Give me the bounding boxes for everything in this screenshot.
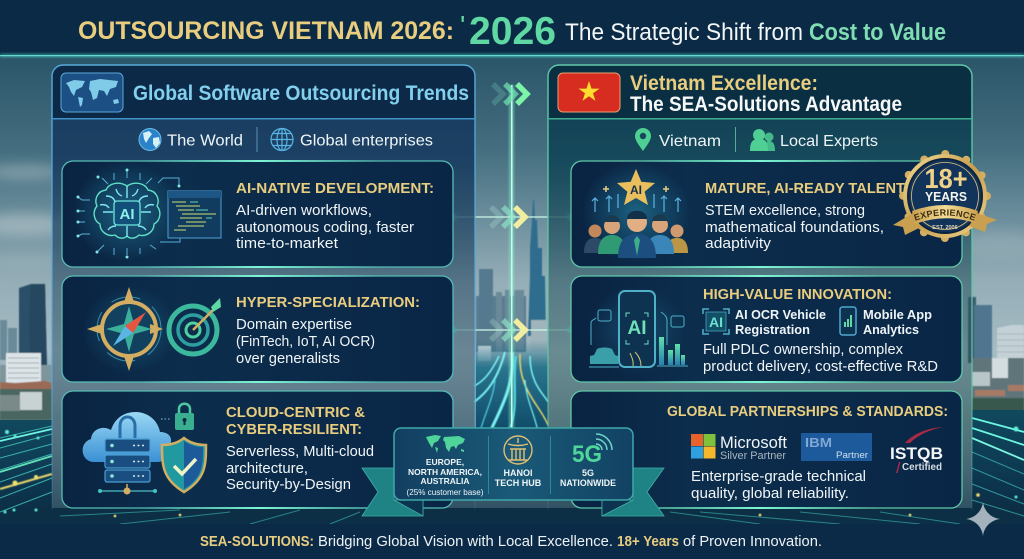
tagline text: Bridging Global Vision with Local Excellence. [318, 534, 613, 550]
text: 5G nationwide: 5G [582, 468, 594, 478]
text: hyper-specialization: (FinTech, IoT, AI OCR) [236, 333, 375, 350]
icon: AI talent team with star [581, 162, 691, 262]
badge: 18+ years experience: EST. 2006 [932, 225, 958, 231]
icon: AI brain and code window: AI [120, 206, 134, 223]
icon: globe [139, 128, 161, 150]
panel: global software outsourcing trends [52, 65, 475, 510]
text: high-value innovation description: Full PDLC ownership, complex [703, 341, 903, 358]
top title band [0, 0, 1024, 58]
text: cloud-centric and cyber-resilient [226, 405, 374, 493]
text: AI-native development: AI-NATIVE DEVELOPMENT: [236, 181, 434, 197]
card: hyper-specialization [62, 275, 453, 383]
text: Hanoi tech hub: TECH HUB [495, 478, 542, 488]
logo: Microsoft Silver Partner [691, 433, 787, 462]
icon: AI phone with car and chart: AI [628, 318, 646, 339]
icon: wire globe [271, 128, 293, 150]
text: regions: EUROPE, [426, 457, 464, 467]
label: AI OCR vehicle registration: Registration [735, 322, 810, 337]
logo: IBM Partner [801, 433, 872, 461]
label: AI OCR vehicle registration: AI OCR Vehicle [735, 307, 826, 322]
label: mobile app analytics [863, 307, 932, 337]
text: cloud-centric and cyber-resilient: architecture, [226, 460, 308, 477]
logo: ISTQB Certified: Certified [902, 461, 942, 473]
badge: 18+ years experience [893, 150, 997, 242]
text: high-value innovation description [703, 341, 938, 375]
text: high-value innovation description: product delivery, cost-effective R&D [703, 358, 938, 375]
tagline text: SEA-SOLUTIONS: [200, 534, 314, 550]
icon: 5G signal: 5G [572, 441, 602, 468]
icon: cloud server and shield [83, 404, 206, 494]
icon: AI OCR frame: AI [709, 314, 723, 330]
text: 5G nationwide [560, 468, 616, 488]
title: Cost to Value [809, 19, 946, 46]
logo: ISTQB Certified [890, 427, 943, 473]
icon: world map tile [61, 73, 123, 112]
title: 2026 [469, 10, 556, 53]
badge: 18+ years experience: EXPERIENCE [914, 209, 976, 221]
text: AI-native development: time-to-market [236, 235, 339, 252]
text: AI-native development: AI-driven workflows, [236, 202, 372, 219]
title: ' [460, 10, 465, 41]
icon: sparkle watermark [966, 502, 1000, 536]
title: OUTSOURCING VIETNAM 2026: [78, 17, 454, 45]
label: mobile app analytics: Analytics [863, 322, 919, 337]
text: hyper-specialization: Domain expertise [236, 316, 352, 333]
text: regions: NORTH AMERICA, [408, 467, 482, 477]
text: partnerships description [691, 468, 866, 502]
icon: local experts people [750, 129, 775, 151]
panel heading: The SEA-Solutions Advantage [630, 93, 902, 116]
text: regions: (25% customer base) [406, 487, 484, 497]
text: cloud-centric and cyber-resilient: CYBER-RESILIENT: [226, 422, 362, 438]
text: partnerships description: Enterprise-grade technical [691, 468, 866, 485]
text: cloud-centric and cyber-resilient: Security-by-Design [226, 476, 351, 493]
logo: IBM Partner: IBM [805, 435, 832, 450]
text: cloud-centric and cyber-resilient: CLOUD-CENTRIC & [226, 405, 366, 421]
logo: Microsoft Silver Partner: Microsoft [720, 433, 787, 452]
icon: Hanoi temple gate [504, 436, 532, 464]
label: mobile app analytics: Mobile App [863, 307, 932, 322]
text: mature AI-ready talent: adaptivity [705, 235, 772, 252]
icon: location pin [635, 128, 651, 151]
icon: AI talent team with star: AI [630, 183, 642, 197]
text: hyper-specialization: HYPER-SPECIALIZATION: [236, 295, 420, 311]
logo: Microsoft Silver Partner: Silver Partner [720, 450, 786, 462]
card: high-value innovation [571, 275, 962, 383]
text: AI-native development [236, 181, 434, 252]
text: high-value innovation heading: HIGH-VALUE INNOVATION: [703, 287, 892, 303]
label: Vietnam: Vietnam [659, 133, 721, 150]
tagline text: of Proven Innovation. [683, 534, 822, 550]
text: regions: AUSTRALIA [420, 476, 470, 486]
panel heading: Global Software Outsourcing Trends [133, 82, 469, 105]
card: global partnerships and standards [571, 391, 962, 509]
text: mature AI-ready talent: mathematical foundations, [705, 219, 884, 236]
icon: Vietnam flag [558, 73, 620, 112]
heading: global partnerships: GLOBAL PARTNERSHIPS & STANDARDS: [667, 404, 948, 420]
icon: green world map [426, 435, 465, 453]
card: AI-native development [62, 160, 453, 268]
bottom tagline band [0, 524, 1024, 559]
icon: AI OCR frame [703, 309, 729, 334]
badge: 18+ years experience: 18+ [924, 163, 968, 194]
text: hyper-specialization: over generalists [236, 350, 340, 367]
central vertical light beam [509, 85, 514, 430]
tagline text [200, 534, 822, 550]
tagline text: 18+ Years [617, 534, 679, 550]
panel heading: Vietnam Excellence: [630, 72, 818, 95]
panel: Vietnam excellence [548, 65, 972, 510]
icon: AI phone with car and chart [587, 286, 688, 374]
text: partnerships description: quality, global reliability. [691, 485, 849, 502]
logo: ISTQB Certified: ISTQB [890, 444, 943, 463]
card: mature AI-ready talent [571, 160, 962, 268]
badge: 18+ years experience: YEARS [925, 190, 967, 204]
icon: 5G signal [572, 434, 612, 468]
text: Hanoi tech hub [495, 468, 542, 488]
text: regions [406, 457, 484, 497]
label: global enterprises: Global enterprises [300, 132, 433, 150]
label: local experts: Local Experts [780, 133, 878, 150]
arrows between panels [451, 84, 573, 340]
text: hyper-specialization [236, 295, 420, 367]
label: AI OCR vehicle registration [735, 307, 826, 337]
title: The Strategic Shift from [565, 19, 803, 46]
text: AI-native development: autonomous coding, faster [236, 219, 414, 236]
icon: compass and target [82, 286, 221, 374]
text: mature AI-ready talent: MATURE, AI-READY TALENT [705, 181, 905, 197]
text: mature AI-ready talent: STEM excellence, strong [705, 202, 865, 219]
title [78, 10, 946, 53]
card: cloud-centric and cyber-resilient [62, 391, 453, 509]
text: 5G nationwide: NATIONWIDE [560, 478, 616, 488]
logo: IBM Partner: Partner [836, 450, 868, 461]
text: Hanoi tech hub: HANOI [504, 468, 532, 478]
icon: mobile analytics phone [840, 307, 856, 335]
text: cloud-centric and cyber-resilient: Serverless, Multi-cloud [226, 443, 374, 460]
icon: AI brain and code window [72, 162, 221, 262]
label: the world: The World [167, 132, 243, 150]
text: mature AI-ready talent [705, 181, 905, 252]
panel heading [630, 72, 902, 116]
ribbon: key facts banner [362, 428, 664, 516]
